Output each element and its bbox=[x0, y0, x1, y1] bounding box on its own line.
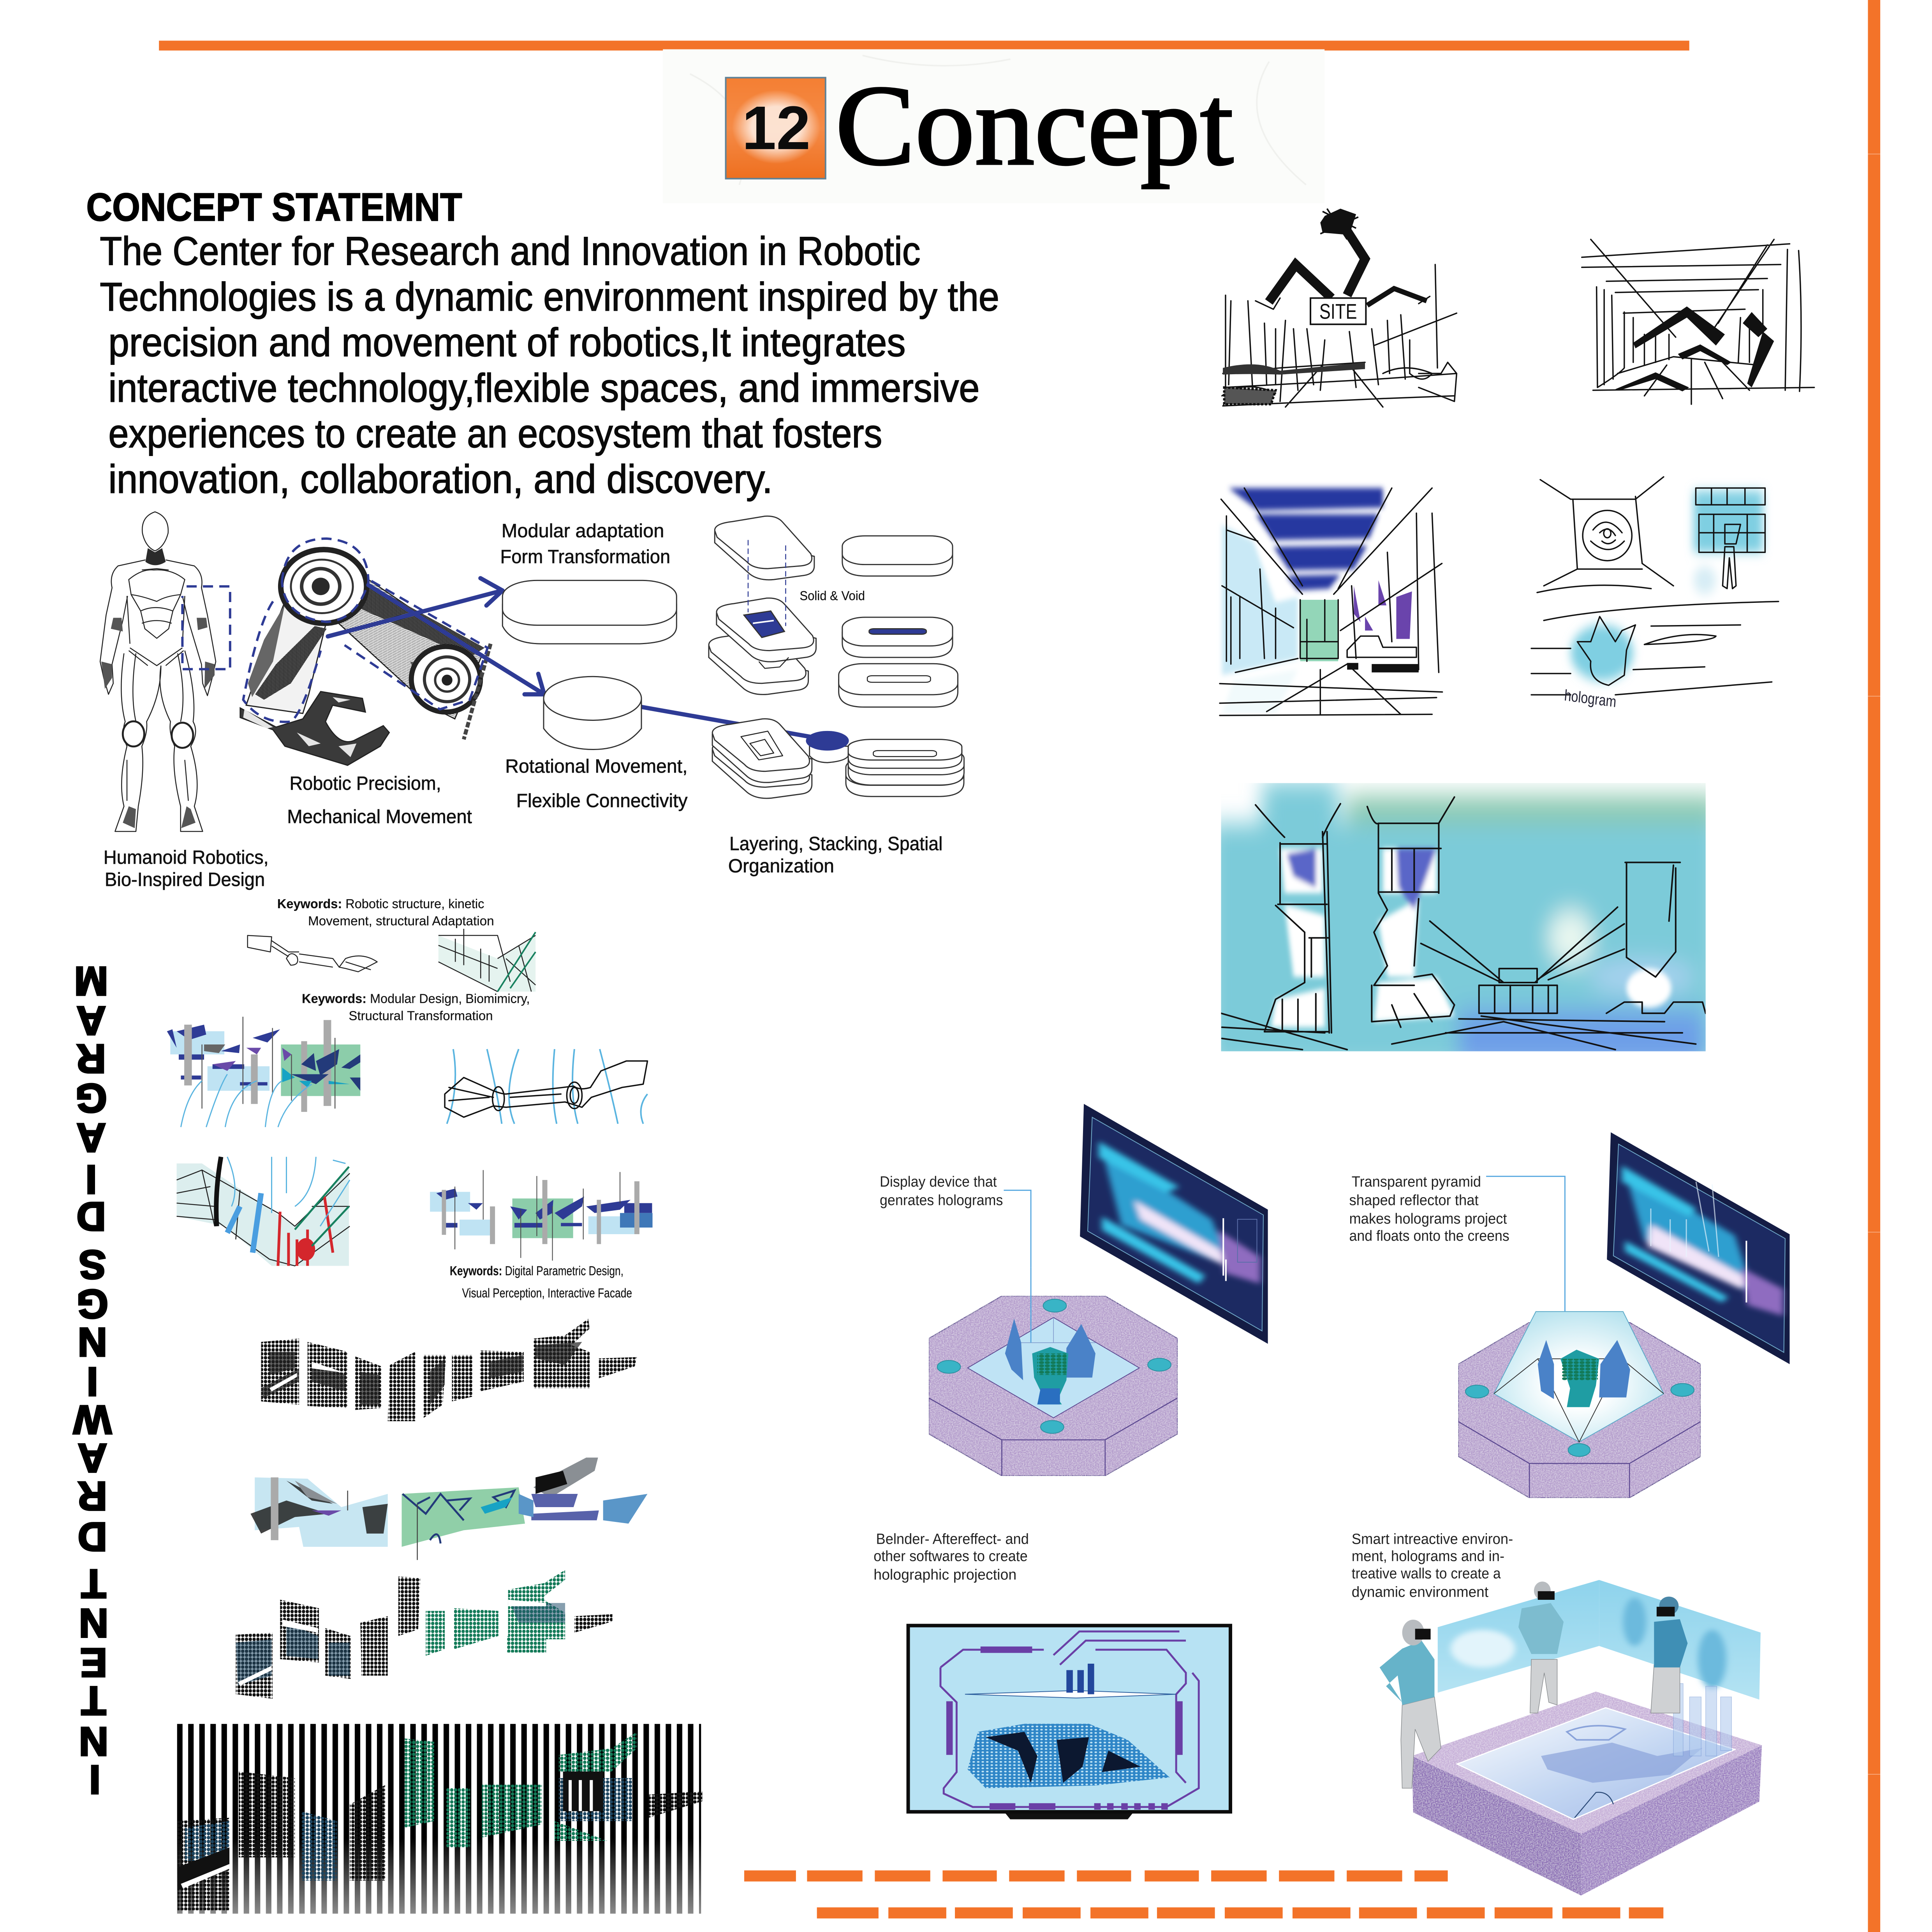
callout text: right column: holographic projection bbox=[874, 1567, 1016, 1583]
icon: cylinder form bbox=[544, 676, 641, 750]
callout text: right column: shaped reflector that bbox=[1349, 1192, 1479, 1208]
vertical title: intent drawings diagram: A bbox=[76, 1115, 106, 1160]
callout text: right column: ment, holograms and in- bbox=[1352, 1548, 1504, 1565]
diagram labels: Solid & Void bbox=[800, 589, 865, 603]
intent drawings bbox=[167, 929, 702, 1914]
callout text: right column: genrates holograms bbox=[880, 1192, 1003, 1208]
keywords text: Keywords: Robotic structure, kinetic bbox=[277, 897, 484, 911]
vertical title: intent drawings diagram bbox=[73, 958, 112, 1802]
sketch: site with robot arms: SITE bbox=[1319, 300, 1357, 324]
text block: concept statement: Technologies is a dynamic environment inspired by the bbox=[100, 274, 999, 319]
arm collage colour bbox=[250, 1458, 648, 1560]
panel: monitor with holographic projection bbox=[908, 1626, 1230, 1819]
sketch: corridor with blue ceiling bbox=[1220, 488, 1442, 715]
dashed arm highlight bbox=[182, 586, 230, 669]
diagram labels bbox=[104, 520, 942, 890]
diagram labels: Layering, Stacking, Spatial bbox=[729, 833, 942, 854]
vertical title: intent drawings diagram: W bbox=[73, 1397, 112, 1442]
heading: Concept: Concept bbox=[835, 62, 1234, 189]
callout text: right column: Transparent pyramid bbox=[1352, 1174, 1481, 1190]
diagram labels: Mechanical Movement bbox=[287, 806, 472, 827]
vertical title: intent drawings diagram: G bbox=[77, 1281, 108, 1327]
icon: small arm sketch bbox=[248, 935, 377, 972]
diagram labels: Robotic Precisiom, bbox=[290, 773, 441, 794]
concept diagram drawings bbox=[100, 512, 964, 831]
vertical title: intent drawings diagram: N bbox=[79, 1719, 108, 1764]
sketch: site with robot arms bbox=[1222, 209, 1456, 407]
vertical title: intent drawings diagram: R bbox=[76, 1036, 106, 1081]
sketch: hologram room: hologram bbox=[1564, 686, 1617, 711]
keywords text: Movement, structural Adaptation bbox=[308, 914, 494, 928]
callout text: right column: Display device that bbox=[880, 1174, 997, 1190]
panel: pyramid reflector platform bbox=[1458, 1132, 1789, 1498]
vertical title: intent drawings diagram: D bbox=[78, 1514, 107, 1560]
vertical title: intent drawings diagram: A bbox=[76, 998, 106, 1043]
callout text: right column: other softwares to create bbox=[874, 1548, 1028, 1565]
diagram labels: Organization bbox=[728, 856, 834, 877]
sketch: teal holographic perspective bbox=[1221, 783, 1706, 1051]
keywords text: Structural Transformation bbox=[349, 1009, 493, 1023]
vertical title: intent drawings diagram: S bbox=[79, 1242, 106, 1287]
diagram labels: Form Transformation bbox=[500, 546, 670, 567]
icon: wall screen 2 bbox=[1607, 1132, 1789, 1364]
diagram labels: Rotational Movement, bbox=[505, 756, 687, 777]
vertical title: intent drawings diagram: G bbox=[76, 1075, 107, 1121]
icon: parametric layer A bbox=[167, 1017, 360, 1127]
keywords text bbox=[277, 897, 632, 1301]
callout text: right column: Smart intreactive environ- bbox=[1352, 1531, 1513, 1547]
vertical title: intent drawings diagram: N bbox=[78, 1319, 107, 1365]
title block bbox=[663, 49, 1324, 203]
callout text: right column: Belnder- Aftereffect- and bbox=[876, 1531, 1029, 1547]
panel: hologram display platform bbox=[929, 1104, 1268, 1476]
icon: arm elbow with red accent bbox=[177, 1157, 350, 1266]
icon: arm grid fragment bbox=[439, 929, 535, 992]
callout text: right column: makes holograms project bbox=[1349, 1211, 1507, 1227]
panel: smart interactive environment bbox=[1380, 1580, 1762, 1895]
sketch: interior with robot arm ceiling bbox=[1582, 240, 1814, 404]
icon: person three bbox=[1651, 1597, 1687, 1713]
keywords text: Keywords: Modular Design, Biomimicry, bbox=[302, 992, 530, 1006]
vertical title: intent drawings diagram: I bbox=[86, 1157, 97, 1202]
hologram illustrations bbox=[908, 1104, 1789, 1895]
vertical title: intent drawings diagram: A bbox=[78, 1435, 107, 1481]
vertical title: intent drawings diagram: E bbox=[80, 1640, 107, 1685]
arrows: concept connections bbox=[328, 578, 810, 737]
icon: person one bbox=[1380, 1620, 1441, 1788]
icon: humanoid robot figure bbox=[100, 512, 230, 831]
icon: number 12 badge: 12 bbox=[742, 93, 810, 162]
orange dashes: upper row bbox=[744, 1870, 1448, 1881]
top orange rule bbox=[159, 41, 1689, 51]
dashed highlight outlines bbox=[243, 539, 488, 722]
icon: arm line sketch with blue lines bbox=[445, 1049, 648, 1124]
callout text: right column bbox=[874, 1174, 1513, 1600]
vertical title: intent drawings diagram: T bbox=[81, 1561, 106, 1606]
text block: concept statement: The Center for Research and Innovation in Robotic bbox=[100, 229, 920, 273]
text block: concept statement bbox=[100, 229, 999, 502]
icon: robotic arm sketch bbox=[240, 539, 491, 765]
icon: parametric layer B bbox=[429, 1170, 653, 1261]
text block: concept statement: precision and movement of robotics,It integrates bbox=[108, 320, 905, 365]
halftone arm: colour bbox=[236, 1570, 613, 1699]
vertical title: intent drawings diagram: R bbox=[78, 1473, 107, 1519]
callout text: right column: dynamic environment bbox=[1352, 1584, 1488, 1600]
icon: person two bbox=[1518, 1582, 1564, 1713]
vertical title: intent drawings diagram: D bbox=[76, 1194, 106, 1239]
text block: concept statement: innovation, collaboration, and discovery. bbox=[108, 457, 773, 502]
callout text: right column: treative walls to create a bbox=[1352, 1566, 1501, 1582]
diagram labels: Bio-Inspired Design bbox=[105, 869, 265, 890]
diagram labels: Modular adaptation bbox=[502, 520, 664, 541]
vertical title: intent drawings diagram: I bbox=[89, 1757, 100, 1802]
heading: concept statement: CONCEPT STATEMNT bbox=[86, 185, 462, 229]
right orange rule bbox=[1868, 0, 1880, 1932]
modular stacking diagrams bbox=[709, 516, 964, 798]
concept sketches bbox=[1208, 209, 1814, 1069]
halftone arm: black bbox=[261, 1319, 637, 1421]
sketch: hologram room bbox=[1531, 477, 1779, 711]
diagram labels: Humanoid Robotics, bbox=[104, 847, 269, 868]
text block: concept statement: interactive technology,flexible spaces, and immersive bbox=[108, 365, 979, 410]
vertical title: intent drawings diagram: T bbox=[81, 1678, 106, 1723]
icon: big rounded slab bbox=[502, 580, 676, 644]
icon: wall screen 1 bbox=[1080, 1104, 1268, 1344]
diagram labels: Flexible Connectivity bbox=[516, 790, 688, 811]
vertical title: intent drawings diagram: M bbox=[74, 958, 108, 1004]
text block: concept statement: experiences to create an ecosystem that fosters bbox=[108, 411, 882, 456]
icon: number 12 badge bbox=[726, 77, 826, 179]
orange dashes: lower row bbox=[817, 1907, 1663, 1918]
keywords text: Keywords: Digital Parametric Design, bbox=[450, 1264, 623, 1279]
vertical title: intent drawings diagram: I bbox=[87, 1359, 98, 1404]
striped halftone panel bbox=[177, 1724, 702, 1914]
vertical title: intent drawings diagram: N bbox=[79, 1600, 108, 1646]
callout text: right column: and floats onto the creens bbox=[1349, 1228, 1509, 1244]
keywords text: Visual Perception, Interactive Facade bbox=[462, 1286, 632, 1301]
